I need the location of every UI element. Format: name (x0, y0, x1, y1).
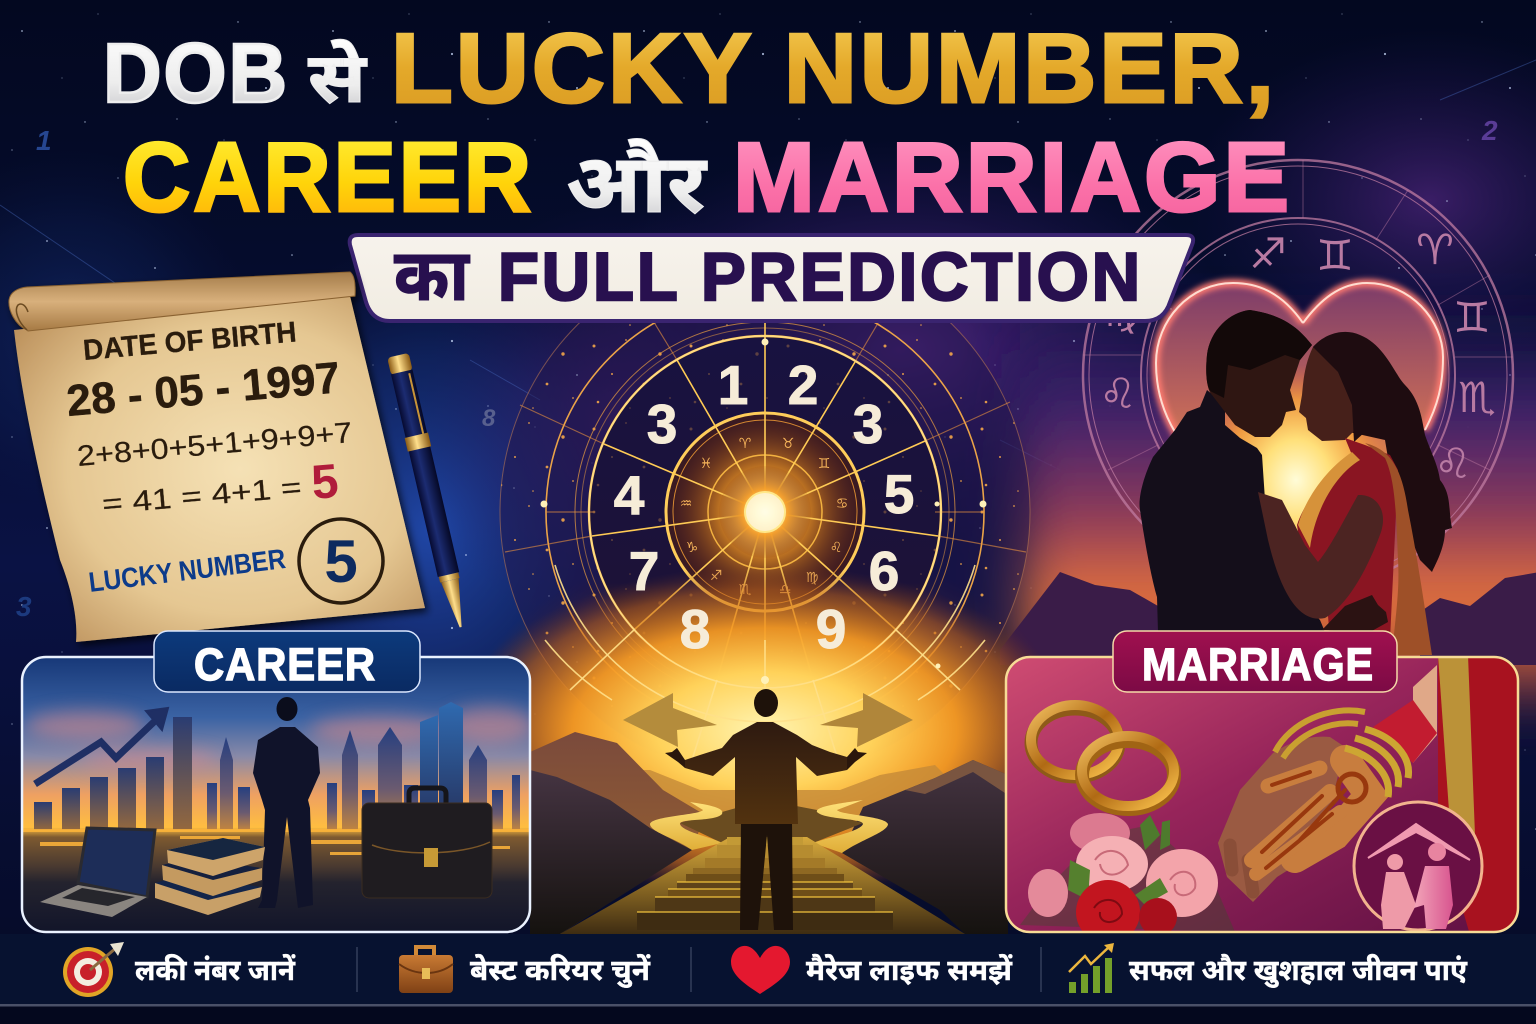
benefit: marriage: मैरेज लाइफ समझें (806, 953, 1013, 987)
zodiac wheel: ♌︎ (1434, 439, 1472, 488)
marriage label: MARRIAGE (1142, 639, 1374, 690)
central numerology wheel: ♑︎ (686, 540, 698, 556)
lucky number circle (299, 519, 383, 603)
birth date: 28 - 05 - 1997 (65, 353, 342, 426)
red sari (1438, 655, 1520, 935)
background space: 2 (1481, 115, 1498, 146)
date of birth heading: DATE OF BIRTH (82, 316, 298, 367)
wheel numbers: 9 (816, 598, 846, 660)
right sunset scene with zodiac wheel and couple (1000, 160, 1536, 700)
left winding road (650, 802, 722, 850)
stone path (560, 837, 965, 934)
briefcase (362, 788, 492, 898)
growth arrow (35, 708, 168, 784)
icon: target (63, 942, 124, 997)
bride forearm and red bangles (1373, 665, 1437, 763)
lucky number label: LUCKY NUMBER (87, 543, 287, 598)
central path scene (530, 689, 1008, 934)
icon: briefcase (399, 947, 453, 993)
benefit: happy life: सफल और खुशहाल जीवन पाएं (1129, 954, 1468, 988)
wedding rings (1031, 705, 1174, 809)
wheel numbers: 2 (788, 354, 818, 416)
city skyline (207, 727, 520, 830)
left mountains (530, 732, 705, 934)
wheel numbers: 5 (884, 463, 914, 525)
wheel numbers: 8 (680, 598, 710, 660)
central numerology wheel: ♒︎ (680, 496, 692, 512)
sunrise glow over wheel bottom (455, 565, 1075, 895)
woman red blouse (1297, 438, 1398, 640)
background space: 3 (16, 591, 32, 622)
central numerology wheel: ♐︎ (710, 568, 722, 584)
wheel numbers: 3 (853, 393, 883, 455)
background space: 1 (36, 125, 52, 156)
subtitle banner: का (394, 236, 471, 316)
icon: growth chart (1069, 943, 1114, 993)
title: से (308, 38, 367, 117)
laptop (40, 828, 155, 917)
result five: 5 (309, 455, 341, 510)
man hair (1206, 310, 1312, 398)
henna hand (1252, 760, 1370, 874)
right winding road (813, 800, 888, 853)
books (155, 838, 265, 915)
career label: CAREER (194, 639, 376, 690)
wheel sparkles (540, 338, 986, 684)
central numerology wheel: ♓︎ (700, 456, 712, 472)
title: CAREER (123, 122, 534, 232)
pen (386, 353, 472, 630)
title: LUCKY NUMBER, (391, 13, 1277, 123)
parchment scroll (9, 272, 425, 642)
benefit: lucky number: लकी नंबर जानें (135, 954, 296, 987)
reduction: = 41 = 4+1 = (101, 472, 303, 521)
wheel rings over glow (545, 336, 985, 760)
digit sum: 2+8+0+5+1+9+9+7 (76, 417, 354, 473)
subtitle banner (350, 235, 1193, 321)
man body (1140, 390, 1325, 632)
zodiac wheel (1083, 160, 1513, 590)
scroll roll (9, 272, 355, 331)
title (103, 13, 1292, 232)
central numerology wheel: ♎︎ (779, 582, 791, 598)
distant haze hills (590, 765, 960, 830)
sunset sky (1020, 300, 1536, 700)
groom hand (1218, 737, 1345, 902)
right mountains (842, 760, 1008, 934)
woman arm (1258, 492, 1383, 619)
central numerology wheel: ♌︎ (830, 540, 842, 556)
growth bars (34, 717, 192, 830)
wheel numbers: 1 (718, 354, 748, 416)
woman hair front (1313, 334, 1378, 442)
zodiac wheel: ♏︎ (1458, 373, 1496, 422)
right arrow (820, 693, 913, 747)
water reflections (22, 829, 530, 855)
sari gold strand (1298, 452, 1360, 548)
wheel numbers: 4 (614, 464, 645, 526)
central numerology wheel: ♏︎ (739, 582, 752, 598)
icon: heart (731, 946, 790, 994)
central glow (465, 540, 1065, 910)
roses (1020, 813, 1234, 931)
wheel spokes (592, 320, 938, 705)
wheel numbers: 7 (629, 540, 659, 602)
zodiac wheel: ♊︎ (1316, 231, 1354, 280)
title: MARRIAGE (733, 122, 1292, 232)
zodiac wheel: ♊︎ (1453, 293, 1491, 342)
glowing heart (1156, 283, 1443, 595)
couple home icon (1354, 802, 1482, 930)
central numerology wheel: ♈︎ (739, 436, 752, 452)
businessman (253, 727, 320, 908)
person with open arms (665, 689, 867, 930)
stairs (637, 837, 893, 930)
man face (1206, 310, 1312, 437)
zodiac wheel: ♍︎ (1103, 287, 1141, 336)
central numerology wheel: ♍︎ (806, 570, 818, 586)
bottom benefits bar (0, 934, 1536, 1024)
wheel numbers: 3 (647, 393, 677, 455)
gold bangles (1275, 710, 1409, 797)
title: DOB (103, 26, 289, 120)
benefit: career: बेस्ट करियर चुनें (470, 953, 651, 988)
central numerology wheel: ♊︎ (818, 456, 830, 472)
couple silhouette (1140, 310, 1452, 655)
title: और (566, 139, 708, 230)
zodiac wheel: ♌︎ (1099, 369, 1137, 418)
left arrow (623, 693, 717, 747)
marriage panel (1006, 631, 1520, 944)
wheel numbers (614, 354, 914, 660)
sari drape (1365, 443, 1432, 655)
woman face (1299, 347, 1372, 441)
career panel (22, 631, 535, 932)
valley floor (680, 800, 863, 843)
central numerology wheel: ♋︎ (836, 496, 848, 512)
woman hair (1313, 332, 1452, 572)
zodiac wheel: ♈︎ (1416, 225, 1454, 274)
man hand (1322, 595, 1388, 632)
lucky number circle: 5 (324, 528, 358, 595)
central numerology wheel (455, 247, 1075, 895)
central numerology wheel: ♉︎ (782, 436, 794, 452)
wheel numbers: 6 (869, 540, 899, 602)
zodiac wheel: ♐︎ (1249, 229, 1287, 278)
subtitle banner: FULL PREDICTION (498, 239, 1143, 315)
career label (154, 631, 420, 692)
background space: 8 (482, 405, 496, 432)
